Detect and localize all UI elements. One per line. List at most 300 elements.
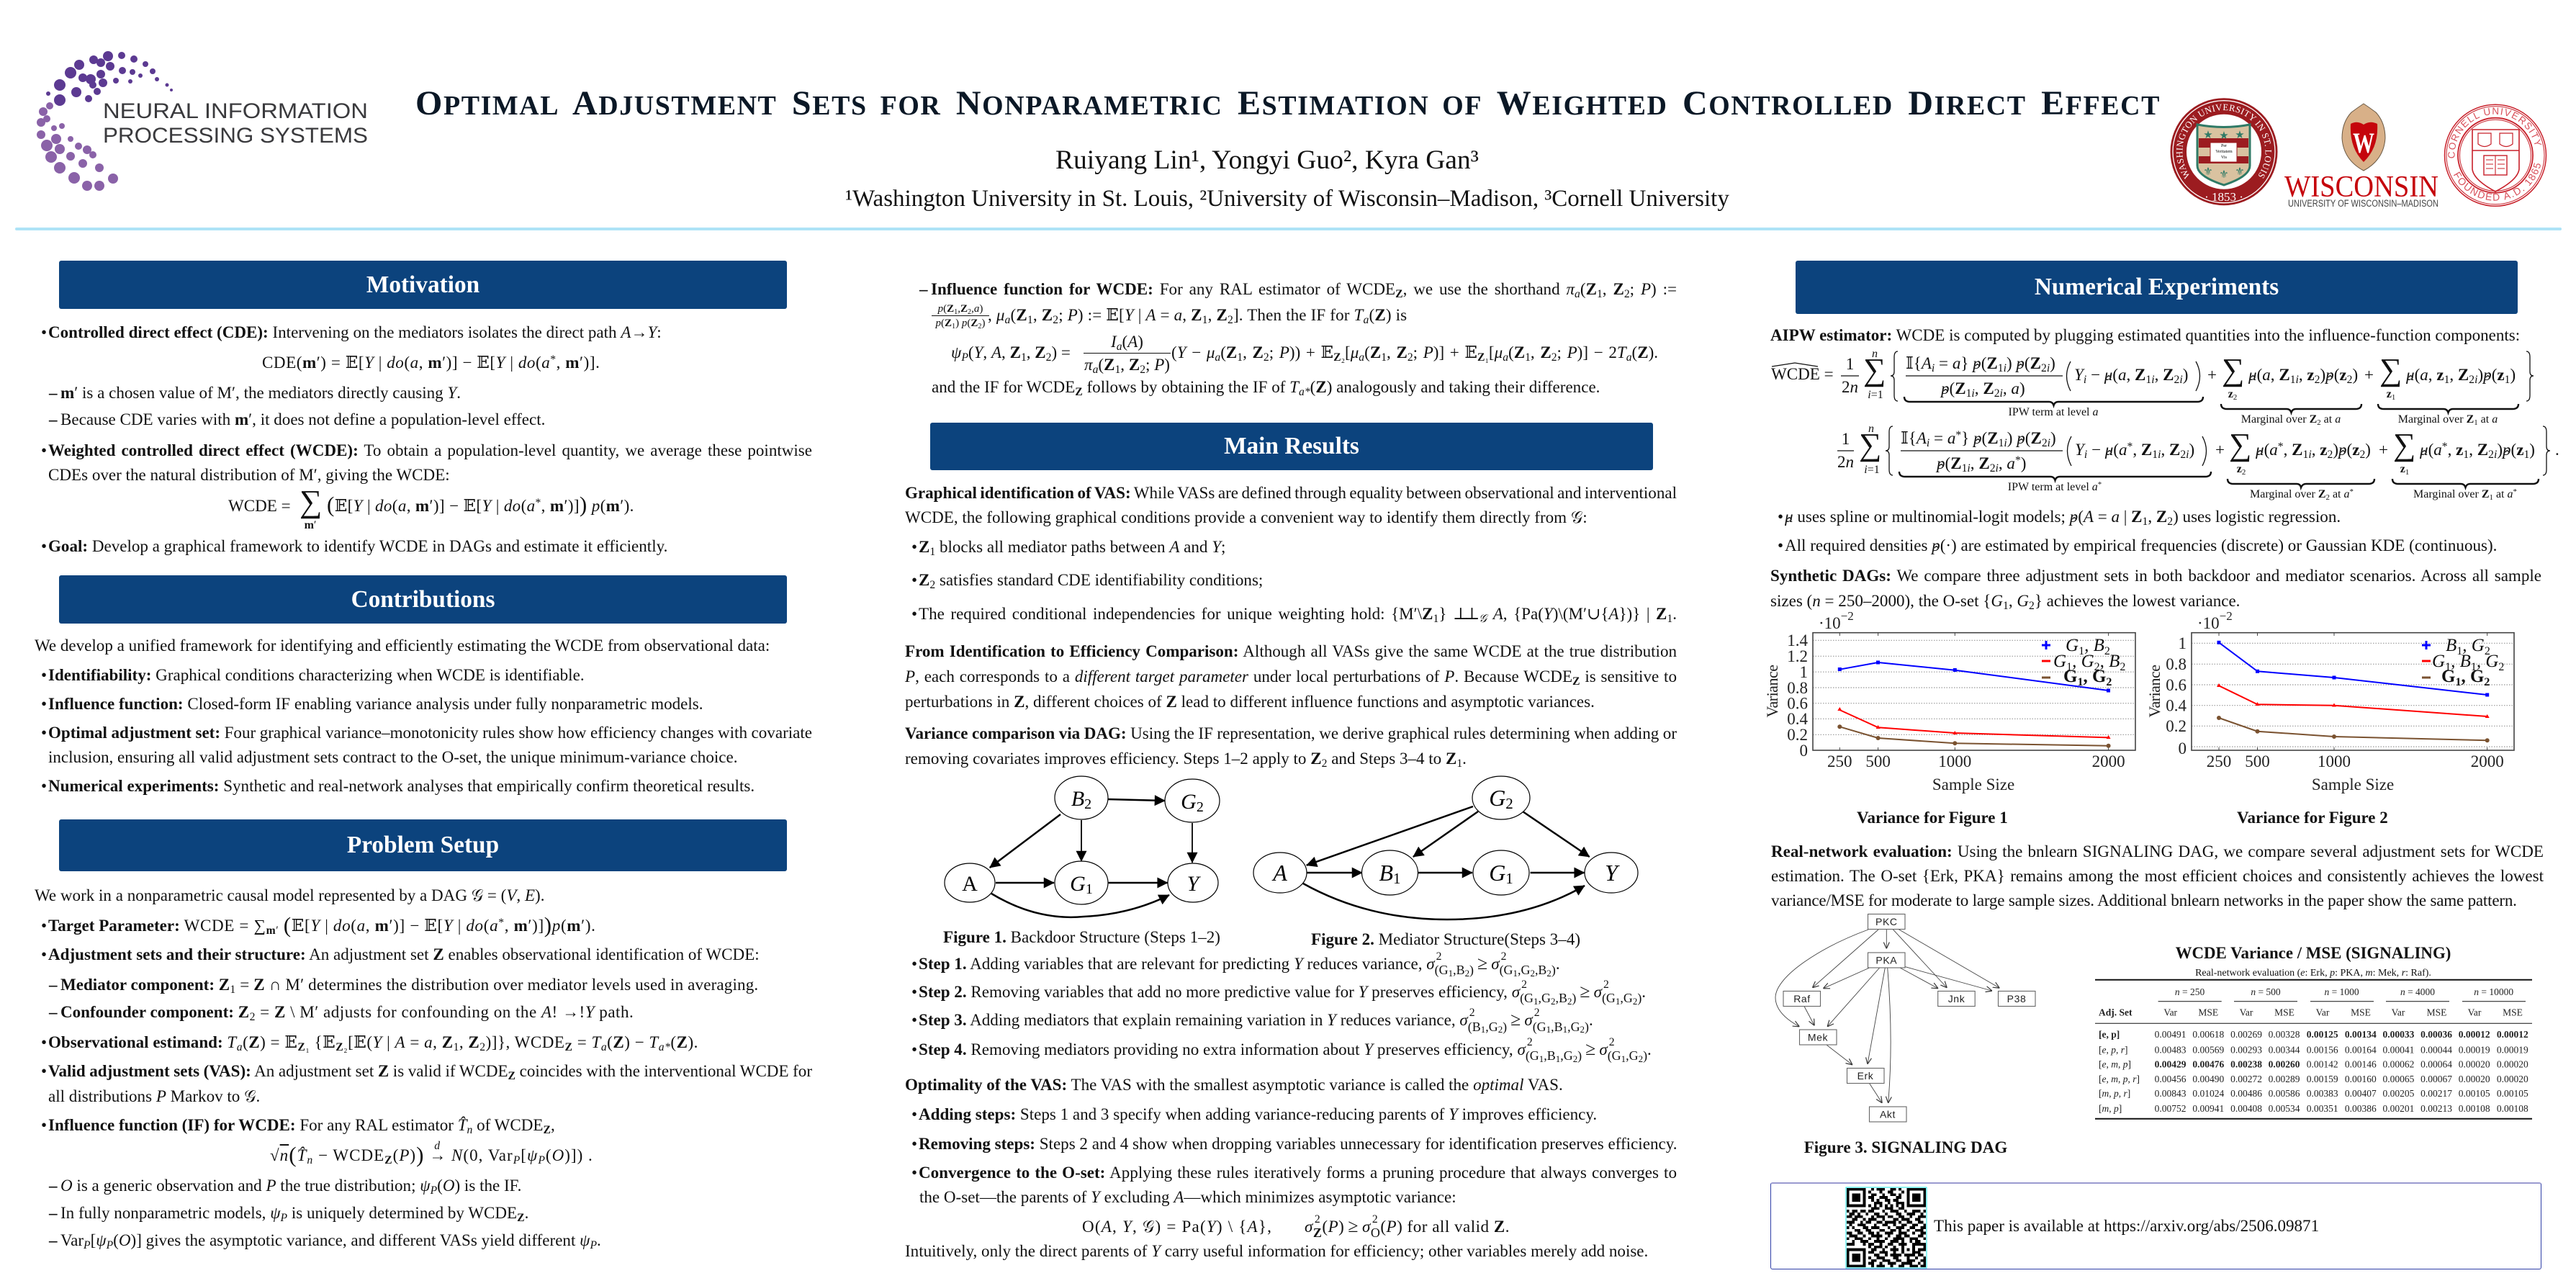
- table: WCDE variance and MSE: MSE: [2503, 1007, 2523, 1018]
- bullet: models used: p: [2070, 507, 2078, 526]
- table: WCDE variance and MSE: 0.00344: [2269, 1044, 2300, 1055]
- table: WCDE variance and MSE: 0.00036: [2420, 1029, 2452, 1040]
- chart: variance for figure 1: 2000: [2092, 752, 2125, 770]
- sub-bullet: mediator component: Mediator component: Z1 = Z ∩ M′ determines the distribution over mediator levels used in averaging.: [60, 975, 758, 996]
- table: WCDE variance and MSE: 0.00108: [2497, 1103, 2528, 1114]
- row 2: outer sum: ∑: [1859, 427, 1881, 462]
- bullet: convergence to the O-set: [911, 1159, 1677, 1210]
- sub-bullet: influence function for WCDE: –: [919, 279, 928, 298]
- table: WCDE variance and MSE: 0.00146: [2345, 1058, 2377, 1069]
- figure 1: backdoor DAG: G: [1181, 790, 1197, 814]
- logo: Washington University seal: WASHINGTON UNIVERSITY IN ST. LOUIS: [2176, 104, 2271, 180]
- text: variance comparison: Variance comparison via DAG: Using the IF representation, we derive graphical rules determining when adding or: [905, 724, 1677, 742]
- bullet: models used: uses spline or multinomial-logit models; (A = a | Z1, Z2) uses logistic regression.: [1797, 507, 2341, 528]
- table: WCDE variance and MSE: 0.00289: [2269, 1074, 2300, 1084]
- bullet: valid adjustment sets: Valid adjustment sets (VAS): An adjustment set Z is valid if WCDEZ coincides with the interventional WCDE for: [48, 1061, 812, 1082]
- variance inequality: 2: [1372, 1213, 1378, 1226]
- row 1: outer sum: ∑: [1863, 352, 1886, 387]
- row 1: constant numerator: 1: [1846, 354, 1854, 373]
- heading: Numerical Experiments: [1796, 261, 2518, 314]
- row 2: sum lower limit: i=1: [1864, 464, 1880, 476]
- text: real-network evaluation: [1771, 839, 2544, 912]
- chart: variance for figure 2: 2000: [2471, 752, 2504, 770]
- table: WCDE variance and MSE: 0.00062: [2382, 1058, 2414, 1069]
- text: synthetic DAGs: sizes (n = 250–2000), the O-set {G1, G2} achieves the lowest variance.: [1770, 591, 2240, 612]
- sub-bullet: nonparametric models: –: [49, 1203, 58, 1222]
- table: WCDE variance and MSE: 0.00019: [2497, 1044, 2528, 1055]
- fraction: [1084, 331, 1171, 374]
- sub-bullet: mediator component: –: [49, 975, 58, 994]
- table: WCDE variance and MSE: 0.00407: [2345, 1088, 2377, 1099]
- table: WCDE variance and MSE: 0.00012: [2459, 1029, 2490, 1040]
- chart: variance for figure 1: 0: [1800, 742, 1808, 760]
- sub-bullet: generic observation: –: [49, 1176, 58, 1195]
- text: optimality of the VAS: Optimality of the VAS: The VAS with the smallest asymptotic variance is called the optimal VAS.: [905, 1075, 1563, 1094]
- equation: asymptotic normality: √n(T̂n − WCDEZ(P)) N(0, VarP[ψP(O)]) .: [270, 1142, 593, 1167]
- table: WCDE variance and MSE: 0.00483: [2155, 1044, 2187, 1055]
- logo: Washington University seal: ⚜: [2203, 166, 2213, 178]
- chart: variance for figure 2: 500: [2245, 752, 2270, 770]
- table: WCDE variance and MSE: Var: [2392, 1007, 2405, 1018]
- table: WCDE variance and MSE: 0.00020: [2497, 1058, 2528, 1069]
- row 2: z1 index: z1: [2400, 463, 2409, 477]
- sub-bullet: nonparametric models: In fully nonparametric models, ψP is uniquely determined by WCDEZ.: [60, 1203, 528, 1224]
- logo: Washington University seal: ★: [2219, 130, 2229, 142]
- bullet: adding steps: •: [911, 1105, 917, 1123]
- chart: variance for figure 2: 0.8: [2166, 655, 2187, 673]
- table: WCDE variance and MSE: 0.00012: [2497, 1029, 2528, 1040]
- row 1: marginal Z1 label: Marginal over Z1 at a: [2398, 413, 2498, 427]
- denominator: p(Z1) p(Z2): [936, 318, 985, 331]
- bullet: conditional independencies: •: [911, 604, 917, 623]
- table: WCDE variance and MSE: 0.00065: [2382, 1074, 2415, 1084]
- chart: variance for figure 2: 1: [2471, 661, 2477, 673]
- equation: CDE: CDE(m′) = 𝔼[Y | do(a, m′)] − 𝔼[Y | do(a*, m′)].: [262, 353, 600, 372]
- table: WCDE variance and MSE: Adj. Set: [2099, 1007, 2133, 1018]
- header divider: [15, 228, 2562, 230]
- bullet: step 3: •: [911, 1010, 917, 1029]
- figure 1: backdoor DAG: Y: [1187, 872, 1202, 896]
- caption: figure 1: Figure 1. Backdoor Structure (Steps 1–2): [943, 927, 1220, 946]
- bullet: models used: •: [1778, 507, 1783, 526]
- variance inequality: σ (P)≥σ (P) for all valid Z.: [1305, 1215, 1510, 1236]
- panel: Problem Setup: [29, 814, 821, 1267]
- psi right side: (Y − μa(Z1, Z2; P)) + 𝔼Z₂[μa(Z1, Z2; P)] + 𝔼Z₁[μa(Z1, Z2; P)] − 2Ta(Z).: [1171, 343, 1658, 364]
- chart: variance for figure 1: 0.4: [1787, 710, 1809, 728]
- bullet: optimal adjustment set: inclusion, ensuring all valid adjustment sets contract to the O-set, the unique minimum-variance choice.: [48, 747, 737, 766]
- panel: Motivation: [41, 261, 812, 555]
- row 1: sum over z1: ∑: [2379, 352, 2402, 387]
- row 1: sum lower limit: i=1: [1868, 389, 1883, 401]
- chart: variance for figure 1: [1764, 612, 2160, 828]
- chart: variance for figure 2: G: [2432, 652, 2445, 671]
- bullet: target parameter: •: [41, 916, 47, 935]
- bullet: step 1: (G1,G2,B2): [1500, 963, 1556, 979]
- bullet: observational estimand: Observational estimand: Ta(Z) = 𝔼Z₁ {𝔼Z₂[𝔼(Y | A = a, Z1, Z2)]}, WCDEZ = Ta(Z) − Ta*(Z).: [48, 1033, 698, 1053]
- table: WCDE variance and MSE: n = 250: [2175, 986, 2205, 997]
- chart: variance for figure 2: 0.2: [2166, 717, 2187, 735]
- row 1: sum upper limit: n: [1872, 348, 1878, 360]
- row 2: constant denominator: 2n: [1837, 452, 1854, 471]
- table: WCDE variance and MSE: 0.00490: [2192, 1074, 2224, 1084]
- bullet: step 4: 2: [1609, 1036, 1615, 1048]
- row 2: plus: +: [2215, 440, 2225, 459]
- table: WCDE variance and MSE: [m, p, r]: [2099, 1088, 2130, 1099]
- bullet: observational estimand: •: [41, 1033, 47, 1051]
- text: variance comparison: removing covariates improves efficiency. Steps 1–2 apply to Z2 and Steps 3–4 to Z1.: [905, 749, 1467, 770]
- bullet: step 3: 2: [1469, 1007, 1475, 1019]
- bullet: step 4: (G1,G2): [1608, 1048, 1647, 1064]
- text: variance comparison: [905, 721, 1677, 771]
- sub-bullet: asymptotic variance: VarP[ψP(O)] gives the asymptotic variance, and different VASs yield different ψP.: [60, 1231, 601, 1251]
- chart: variance for figure 2: 1: [2445, 661, 2451, 673]
- logo: Washington University seal: Veritatem: [2215, 150, 2233, 154]
- chart: variance for figure 1: , B: [2100, 652, 2120, 671]
- chart: variance for figure 2: , G: [2461, 667, 2484, 686]
- row 2: marginal over Z2: μ: [2256, 440, 2264, 459]
- table: WCDE variance and MSE: Real-network evaluation (e: Erk, p: PKA, m: Mek, r: Raf).: [2195, 968, 2431, 979]
- bullet: valid adjustment sets: [41, 1058, 812, 1109]
- bullet: step 1: Step 1. Adding variables that are relevant for predicting Y reduces variance, σ ≥σ .: [919, 953, 1560, 974]
- authors: Ruiyang Lin¹, Yongyi Guo², Kyra Gan³: [1055, 145, 1479, 174]
- chart: variance for figure 1: , G: [2083, 667, 2106, 686]
- table: WCDE variance and MSE: 0.00205: [2382, 1088, 2415, 1099]
- chart: variance for figure 2: Variance for Figure 2: [2237, 809, 2388, 827]
- table: WCDE variance and MSE: 0.00386: [2345, 1103, 2377, 1114]
- logo: University of Wisconsin crest and wordmark: UNIVERSITY OF WISCONSIN–MADISON: [2288, 198, 2438, 209]
- bullet: step 2: Step 2. Removing variables that add no more predictive value for Y preserves efficiency, σ ≥σ .: [919, 981, 1646, 1001]
- callout: paper link box: [1770, 1182, 2541, 1269]
- heading: Main Results: [930, 422, 1653, 469]
- table: WCDE variance and MSE: 0.00586: [2269, 1088, 2300, 1099]
- fraction numerator: [1084, 331, 1171, 354]
- figure 3: SIGNALING DAG: PKA: [1875, 955, 1897, 966]
- figure 3: SIGNALING DAG: [1771, 907, 2045, 1127]
- table: WCDE variance and MSE: 0.00067: [2420, 1074, 2452, 1084]
- figure 2: mediator DAG: G: [1489, 860, 1505, 886]
- table: WCDE variance and MSE: 0.00164: [2345, 1044, 2377, 1055]
- chart: variance for figure 1: G: [2066, 636, 2079, 655]
- chart: variance for figure 1: 2: [2106, 676, 2112, 688]
- heading: Numerical Experiments: Numerical Experiments: [2035, 274, 2279, 300]
- row 2: IPW denominator: p: [1937, 454, 1945, 472]
- table: WCDE variance and MSE: [e, p, r]: [2099, 1044, 2128, 1055]
- table: WCDE variance and MSE: 0.00618: [2192, 1029, 2224, 1040]
- row 1: marginal over Z2: (a, Z1i, z2) (z2): [2257, 365, 2358, 386]
- table: WCDE variance and MSE: 0.00456: [2155, 1074, 2187, 1084]
- equation: asymptotic normality: →: [429, 1146, 446, 1164]
- figure 3: SIGNALING DAG: Raf: [1793, 993, 1811, 1004]
- figure 1: backdoor DAG: A: [962, 872, 978, 896]
- row 2: IPW denominator: (Z1i, Z2i, a*): [1945, 454, 2026, 475]
- bullet: goal: Goal: Develop a graphical framework to identify WCDE in DAGs and estimate it efficiently.: [48, 536, 667, 555]
- table: WCDE variance and MSE: 0.01024: [2192, 1088, 2224, 1099]
- figure 2: mediator DAG: B: [1379, 860, 1393, 886]
- bullet: step 3: (B1,G2): [1468, 1020, 1507, 1035]
- equation delimiters and rules: [1764, 346, 2570, 504]
- table: WCDE variance and MSE: 0.00156: [2307, 1044, 2338, 1055]
- figure 2: mediator DAG: 1: [1393, 870, 1401, 887]
- table: WCDE variance and MSE: 0.00534: [2269, 1103, 2300, 1114]
- table: WCDE variance and MSE: 0.00569: [2192, 1044, 2224, 1055]
- chart: variance for figure 2: , G: [2462, 636, 2485, 655]
- table: WCDE variance and MSE: 0.00351: [2307, 1103, 2338, 1114]
- heading: Main Results: Main Results: [1224, 432, 1359, 459]
- bullet: step 2: 2: [1603, 979, 1609, 991]
- chart: variance for figure 1: G: [2063, 667, 2077, 686]
- text: graphical identification: Graphical identification of VAS: While VASs are defined through equality between observational and interventional: [905, 483, 1677, 502]
- logo: Cornell University seal: FOUNDED A.D. 1865: [2454, 163, 2541, 201]
- sub-bullet: CDE varies: –: [49, 410, 58, 428]
- chart: variance for figure 2: 0: [2179, 739, 2187, 757]
- table: WCDE variance and MSE: Var: [2240, 1007, 2253, 1018]
- chart: variance for figure 1: 1: [2066, 661, 2072, 673]
- chart: variance for figure 1: Sample Size: [1932, 775, 2014, 793]
- logo: Neural Information Processing Systems: PROCESSING SYSTEMS: [103, 124, 368, 148]
- variance inequality: 2: [1315, 1213, 1320, 1226]
- text: identification to efficiency: [905, 639, 1677, 714]
- bullet: step 2: (G1,G2,B2): [1520, 991, 1576, 1007]
- figure 3: SIGNALING DAG: P38: [2007, 993, 2026, 1004]
- shorthand: fraction: [932, 302, 989, 331]
- bullet: weighted controlled direct effect: Weighted controlled direct effect (WCDE): To obtain a population-level quantity, we average these pointwise: [48, 441, 812, 459]
- text: identification to efficiency: From Identification to Efficiency Comparison: Although all VASs give the same WCDE at the true distribution: [905, 642, 1677, 660]
- table: WCDE variance and MSE: 0.00238: [2230, 1058, 2262, 1069]
- table: WCDE variance and MSE: 0.00486: [2230, 1088, 2262, 1099]
- table: WCDE variance and MSE: 0.00429: [2155, 1058, 2187, 1069]
- chart: variance for figure 2: 0.4: [2166, 697, 2187, 714]
- figure 1: backdoor DAG: G: [1070, 872, 1086, 896]
- bullet: step 4: Step 4. Removing mediators providing no extra information about Y preserves efficiency, σ ≥σ .: [919, 1038, 1652, 1059]
- chart: variance for figure 1: 1.4: [1787, 631, 1809, 649]
- table: WCDE variance and MSE: 0.00260: [2269, 1058, 2300, 1069]
- figure 3: SIGNALING DAG: PKC: [1875, 916, 1898, 927]
- table: WCDE variance and MSE: n = 1000: [2325, 986, 2359, 997]
- logo: Washington University seal: ⚜: [2219, 169, 2229, 181]
- chart: variance for figure 2: Sample Size: [2312, 775, 2394, 793]
- row 1: z1 index: z1: [2387, 388, 2395, 402]
- row 2: marginal over Z2: p: [2338, 440, 2347, 459]
- bullet: numerical experiments: Numerical experiments: Synthetic and real-network analyses that empirically confirm theoretical results.: [48, 776, 755, 795]
- table: WCDE variance and MSE: 0.00217: [2420, 1088, 2452, 1099]
- row 1: IPW denominator: (Z1i, Z2i, a): [1950, 379, 2025, 400]
- row 2: marginal over Z2: (a*, Z1i, z2) (z2): [2264, 440, 2371, 461]
- row 2: marginal Z2 label: Marginal over Z2 at a*: [2250, 487, 2354, 502]
- O-set definition: O(A, Y, 𝒢) = Pa(Y) \ {A},: [1082, 1217, 1272, 1236]
- table: WCDE variance and MSE: [m, p]: [2099, 1103, 2122, 1114]
- table: WCDE variance and MSE: 0.00142: [2307, 1058, 2338, 1069]
- heading: Contributions: Contributions: [351, 586, 495, 613]
- logo: Washington University seal: ⚜: [2235, 166, 2245, 178]
- table: WCDE variance and MSE: 0.00213: [2420, 1103, 2452, 1114]
- table: WCDE variance and MSE: 0.00269: [2230, 1029, 2262, 1040]
- bullet: step 2: 2: [1521, 979, 1527, 991]
- chart: variance for figure 1: 500: [1865, 752, 1891, 770]
- chart: variance for figure 2: 1: [2179, 634, 2187, 652]
- row 1: constant denominator: 2n: [1842, 377, 1858, 396]
- intro text: We develop a unified framework for identifying and efficiently estimating the WCDE from observational data:: [35, 636, 770, 655]
- chart: variance for figure 1: 1: [1800, 663, 1808, 681]
- row 2: IPW numerator: p: [1973, 428, 1982, 447]
- caption: figure 3: Figure 3. SIGNALING DAG: [1804, 1138, 2007, 1156]
- row 2: residual: Yi − (a*, Z1i, Z2i): [2075, 440, 2194, 461]
- heading: Motivation: [59, 261, 787, 309]
- table: WCDE variance and MSE: Var: [2316, 1007, 2330, 1018]
- chart: variance for figure 1: 2: [2120, 661, 2125, 673]
- row 2: sum over z2: ∑: [2229, 427, 2251, 462]
- row 1: IPW numerator: 𝕀{Ai = a} (Z1i) (Z2i): [1906, 354, 2055, 374]
- table: WCDE variance and MSE: MSE: [2351, 1007, 2371, 1018]
- bullet: Z2 condition: Z2 satisfies standard CDE identifiability conditions;: [919, 570, 1263, 591]
- row 2: constant numerator: 1: [1842, 429, 1850, 448]
- table: WCDE variance and MSE: n = 500: [2251, 986, 2281, 997]
- figure 1: backdoor DAG: [936, 770, 1267, 925]
- table: WCDE variance and MSE: 0.00383: [2307, 1088, 2338, 1099]
- bullet: adjustment sets: •: [41, 945, 47, 963]
- row 2: marginal over Z1: (a*, z1, Z2i) (z1): [2428, 440, 2535, 461]
- figure 1: backdoor DAG: 2: [1084, 796, 1091, 812]
- logo: Neural Information Processing Systems: NEURAL INFORMATION: [103, 99, 368, 123]
- row 1: left side: WCDE =: [1771, 364, 1834, 383]
- closing sentence: and the IF for WCDEZ follows by obtaining the IF of Ta*(Z) analogously and taking their difference.: [932, 377, 1600, 398]
- text: real-network evaluation: estimation. The O-set {Erk, PKA} remains among the most efficient choices and consistently achieves the lowest: [1771, 866, 2544, 885]
- variance inequality: Z: [1313, 1226, 1322, 1240]
- intro text: We work in a nonparametric causal model represented by a DAG 𝒢 = (V, E).: [35, 886, 544, 904]
- table: WCDE variance and MSE: 0.00160: [2345, 1074, 2377, 1084]
- bullet: removing steps: •: [911, 1134, 917, 1153]
- bullet: densities: All required densities (·) are estimated by empirical frequencies (discrete) or Gaussian KDE (continuous).: [1785, 536, 2497, 554]
- bullet: identifiability: Identifiability: Graphical conditions characterizing when WCDE is identifiable.: [48, 665, 585, 684]
- row 1: IPW numerator: p: [2016, 354, 2025, 372]
- row 2: marginal Z1 label: Marginal over Z1 at a*: [2413, 487, 2517, 502]
- table: WCDE variance and MSE: 0.00125: [2307, 1029, 2338, 1040]
- bullet: influence function: •: [41, 694, 47, 713]
- chart: variance for figure 2: ·10: [2197, 614, 2220, 632]
- figure 2: mediator DAG: [1274, 770, 1634, 925]
- bullet: adding steps: Adding steps: Steps 1 and 3 specify when adding variance-reducing parents of Y improves efficiency.: [919, 1105, 1597, 1123]
- figure 2: mediator DAG: Y: [1605, 860, 1620, 886]
- bullet: adjustment sets: Adjustment sets and their structure: An adjustment set Z enables observational identification of WCDE:: [48, 945, 760, 963]
- table: WCDE variance and MSE: 0.00752: [2155, 1103, 2186, 1114]
- row 2: IPW numerator: 𝕀{Ai = a*} (Z1i) (Z2i): [1901, 428, 2056, 449]
- row 1: marginal over Z2: p: [2325, 365, 2334, 384]
- bullet: Z1 condition: Z1 blocks all mediator paths between A and Y;: [919, 537, 1225, 558]
- bullet: step 1: 2: [1436, 950, 1441, 963]
- text: identification to efficiency: perturbations in Z, different choices of Z lead to different influence functions and asymptotic variances.: [905, 692, 1595, 711]
- WCDE summand: (𝔼[Y | do(a, m′)] − 𝔼[Y | do(a*, m′)]) p(m′).: [327, 492, 634, 517]
- heading: Problem Setup: [59, 819, 787, 871]
- table: WCDE variance and MSE: 0.00941: [2192, 1103, 2224, 1114]
- figure 1: backdoor DAG: 1: [1086, 881, 1093, 897]
- table: WCDE variance and MSE: 0.00272: [2230, 1074, 2262, 1084]
- chart: variance for figure 1: 0.6: [1787, 694, 1808, 713]
- table: WCDE variance and MSE: n = 4000: [2400, 986, 2435, 997]
- row 2: IPW label: IPW term at level a*: [2008, 480, 2102, 493]
- heading: Contributions: [59, 575, 787, 624]
- chart: variance for figure 1: , B: [2084, 636, 2104, 655]
- caption: figure 2: Figure 2. Mediator Structure(Steps 3–4): [1311, 930, 1580, 948]
- row 1: residual: μ: [2104, 365, 2112, 384]
- chart: variance for figure 2: [2160, 612, 2549, 828]
- icon: QR code: [1846, 1187, 1927, 1267]
- table: WCDE variance and MSE: MSE: [2198, 1007, 2218, 1018]
- sub-bullet: chosen value: –: [49, 383, 58, 402]
- row 1: plus: +: [2364, 365, 2374, 384]
- table: WCDE variance and MSE: 0.00408: [2230, 1103, 2262, 1114]
- table: WCDE variance and MSE: [e, m, p]: [2099, 1058, 2131, 1069]
- chart: variance for figure 1: 2: [2104, 645, 2110, 657]
- bullet: numerical experiments: •: [41, 776, 47, 795]
- logo: University of Wisconsin crest and wordmark: W: [2353, 127, 2374, 159]
- bullet: weighted controlled direct effect: CDEs over the natural distribution of M′, giving the WCDE:: [48, 465, 450, 484]
- text: paper availability: This paper is available at https://arxiv.org/abs/2506.09871: [1934, 1215, 2319, 1234]
- chart: variance for figure 2: 1000: [2318, 752, 2351, 770]
- row 2: IPW numerator: p: [2017, 428, 2025, 447]
- bullet: step 3: 2: [1534, 1007, 1540, 1019]
- table: WCDE variance and MSE: [2088, 936, 2549, 1130]
- bullet: step 2: •: [911, 982, 917, 1001]
- bullet: models used: μ: [1785, 507, 1793, 526]
- chart: variance for figure 1: G: [2053, 652, 2066, 671]
- chart: variance for figure 1: 1: [2079, 645, 2084, 657]
- logo: University of Wisconsin crest and wordmark: WISCONSIN: [2284, 171, 2438, 204]
- bullet: step 1: 2: [1501, 950, 1506, 963]
- text: AIPW estimator: AIPW estimator: WCDE is computed by plugging estimated quantities into the influence-function components:: [1770, 325, 2520, 344]
- table: WCDE variance and MSE: [e, m, p, r]: [2099, 1074, 2140, 1084]
- row 2: z2 index: z2: [2237, 463, 2246, 477]
- table: WCDE variance and MSE: n = 10000: [2474, 986, 2513, 997]
- figure 1: backdoor DAG: B: [1071, 787, 1084, 811]
- table: WCDE variance and MSE: 0.00020: [2459, 1058, 2490, 1069]
- bullet: step 3: (G1,B1,G2): [1533, 1020, 1589, 1035]
- chart: variance for figure 1: Variance for Figure 1: [1857, 809, 2008, 827]
- logo: Cornell University seal: CORNELL UNIVERSITY: [2448, 108, 2541, 158]
- row 2: sum over z1: ∑: [2393, 427, 2415, 462]
- row 2: plus: +: [2379, 440, 2388, 459]
- chart: variance for figure 2: 2: [2484, 676, 2490, 688]
- chart: variance for figure 2: G: [2441, 667, 2455, 686]
- logo: Washington University seal: Per: [2221, 144, 2227, 148]
- chart: variance for figure 1: 250: [1827, 752, 1852, 770]
- heading: Motivation: Motivation: [366, 271, 479, 298]
- bullet: step 4: •: [911, 1040, 917, 1058]
- bullet: identifiability: •: [41, 665, 47, 684]
- chart: variance for figure 1: 2: [2094, 661, 2100, 673]
- table: WCDE variance and MSE: 0.00033: [2382, 1029, 2415, 1040]
- bullet: convergence to the O-set: Convergence to the O-set: Applying these rules iteratively forms a pruning procedure that always converges to: [919, 1162, 1677, 1181]
- table: WCDE variance and MSE: 0.00159: [2307, 1074, 2338, 1084]
- chart: variance for figure 1: Variance: [1763, 665, 1781, 717]
- equation: WCDE: [228, 490, 639, 536]
- table: WCDE variance and MSE: 0.00843: [2155, 1088, 2187, 1099]
- WCDE left side: WCDE =: [228, 496, 291, 515]
- fraction denominator: πa(Z1, Z2; P): [1084, 355, 1170, 376]
- table: WCDE variance and MSE: 0.00201: [2382, 1103, 2414, 1114]
- numerator: p(Z1,Z2,a): [938, 303, 983, 316]
- bullet: convergence to the O-set: •: [911, 1162, 917, 1181]
- chart: variance for figure 2: B: [2446, 636, 2456, 655]
- bullet: step 3: Step 3. Adding mediators that explain remaining variation in Y reduces variance, σ ≥σ .: [919, 1009, 1593, 1030]
- figure 2: mediator DAG: G: [1489, 785, 1505, 811]
- panel: Main Results: [893, 418, 1685, 1274]
- chart: variance for figure 2: 1: [2455, 676, 2461, 688]
- table: WCDE variance and MSE: 0.00019: [2459, 1044, 2490, 1055]
- sub-bullet: confounder component: Confounder component: Z2 = Z \ M′ adjusts for confounding on the A! →!Y path.: [60, 1002, 634, 1023]
- logo: Washington University seal: ★: [2203, 130, 2213, 141]
- table: WCDE variance and MSE: 0.00044: [2420, 1044, 2452, 1055]
- bullet: step 4: 2: [1527, 1036, 1533, 1048]
- variance inequality: O: [1371, 1226, 1380, 1240]
